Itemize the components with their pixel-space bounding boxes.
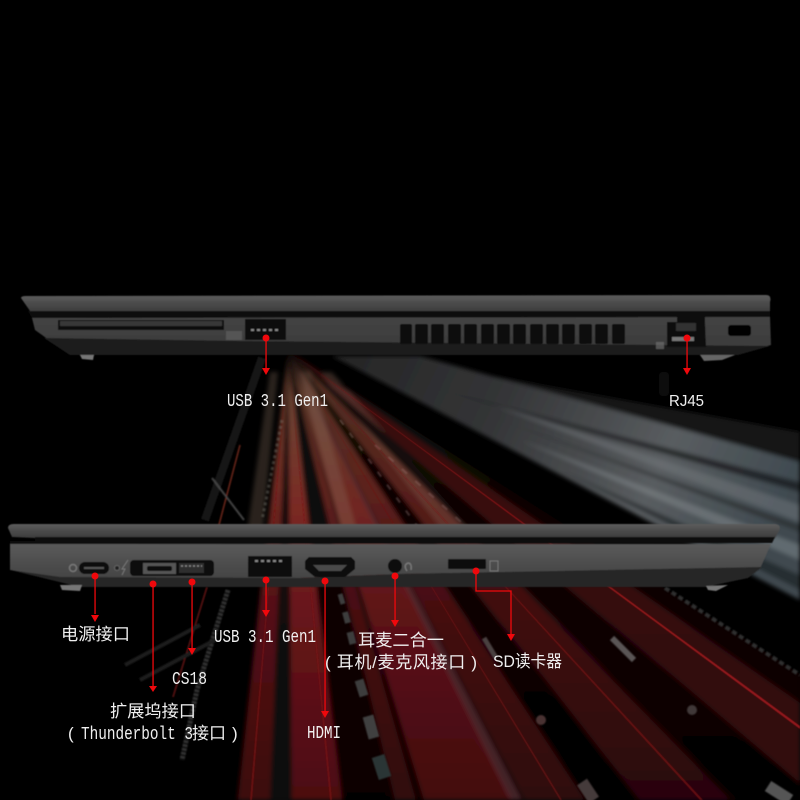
label: headset: 耳麦二合一 [358,631,444,650]
label: RJ45: RJ45 [669,393,704,410]
label: SD reader: SD读卡器 [493,652,562,671]
pointer: top USB [262,334,270,375]
power USB-C port [79,562,109,574]
label: HDMI: HDMI [307,724,341,744]
lid [21,295,770,312]
hinge gap [28,311,770,318]
docking port [130,560,214,576]
label: power: 电源接口 [61,625,130,644]
label: dock: 扩展坞接口 [110,702,196,721]
USB 3.1 port [245,319,286,340]
white light trails [332,356,800,600]
USB icon [226,331,242,340]
label: Thunderbolt: ) [232,724,238,743]
hinge gap [10,537,775,544]
label: Thunderbolt: Thunderbolt 3 [81,725,193,745]
headset icon [405,563,411,571]
RJ45 port [667,316,706,347]
lid [8,524,780,538]
label: bottom USB: USB 3.1 Gen1 [214,628,316,648]
rubber foot right [700,355,735,361]
label: Thunderbolt: ( [68,724,74,743]
chassis base [10,567,762,587]
chassis side [10,544,771,578]
network icon [656,342,664,349]
label: headset detail: ( 耳机/麦克风接口 ) [325,653,477,672]
pointer: RJ45 [683,334,691,375]
pointer: bottom USB [262,576,270,617]
pointer: headset [391,572,399,627]
SD card slot [448,559,486,569]
chassis side [32,317,771,355]
rubber foot left [80,355,94,360]
expansion card slot [58,320,224,330]
SD icon [490,561,498,571]
pointer: SD [472,568,515,641]
laptop: left side view [8,524,780,591]
rubber foot left [60,585,82,591]
label: top USB: USB 3.1 Gen1 [227,392,328,412]
lock slot [728,325,751,336]
audio jack [388,559,402,573]
red light trails [236,350,800,800]
HDMI port [305,557,355,577]
label: CS18: CS18 [172,670,207,690]
label: Thunderbolt: 接口 [192,724,226,743]
laptop: right side view [21,295,771,361]
chassis base [44,338,770,355]
pointer: power [91,572,99,622]
USB 3.1 port [248,556,292,577]
power icon [70,564,76,572]
ventilation grille [400,324,625,344]
thunderbolt icon [114,560,128,575]
road lane markings [125,358,800,800]
pointer: HDMI [321,578,329,718]
pointer: dock [149,580,157,692]
rubber foot right [706,585,728,591]
thin red lines [250,350,800,800]
pointer: CS18 [188,578,196,655]
